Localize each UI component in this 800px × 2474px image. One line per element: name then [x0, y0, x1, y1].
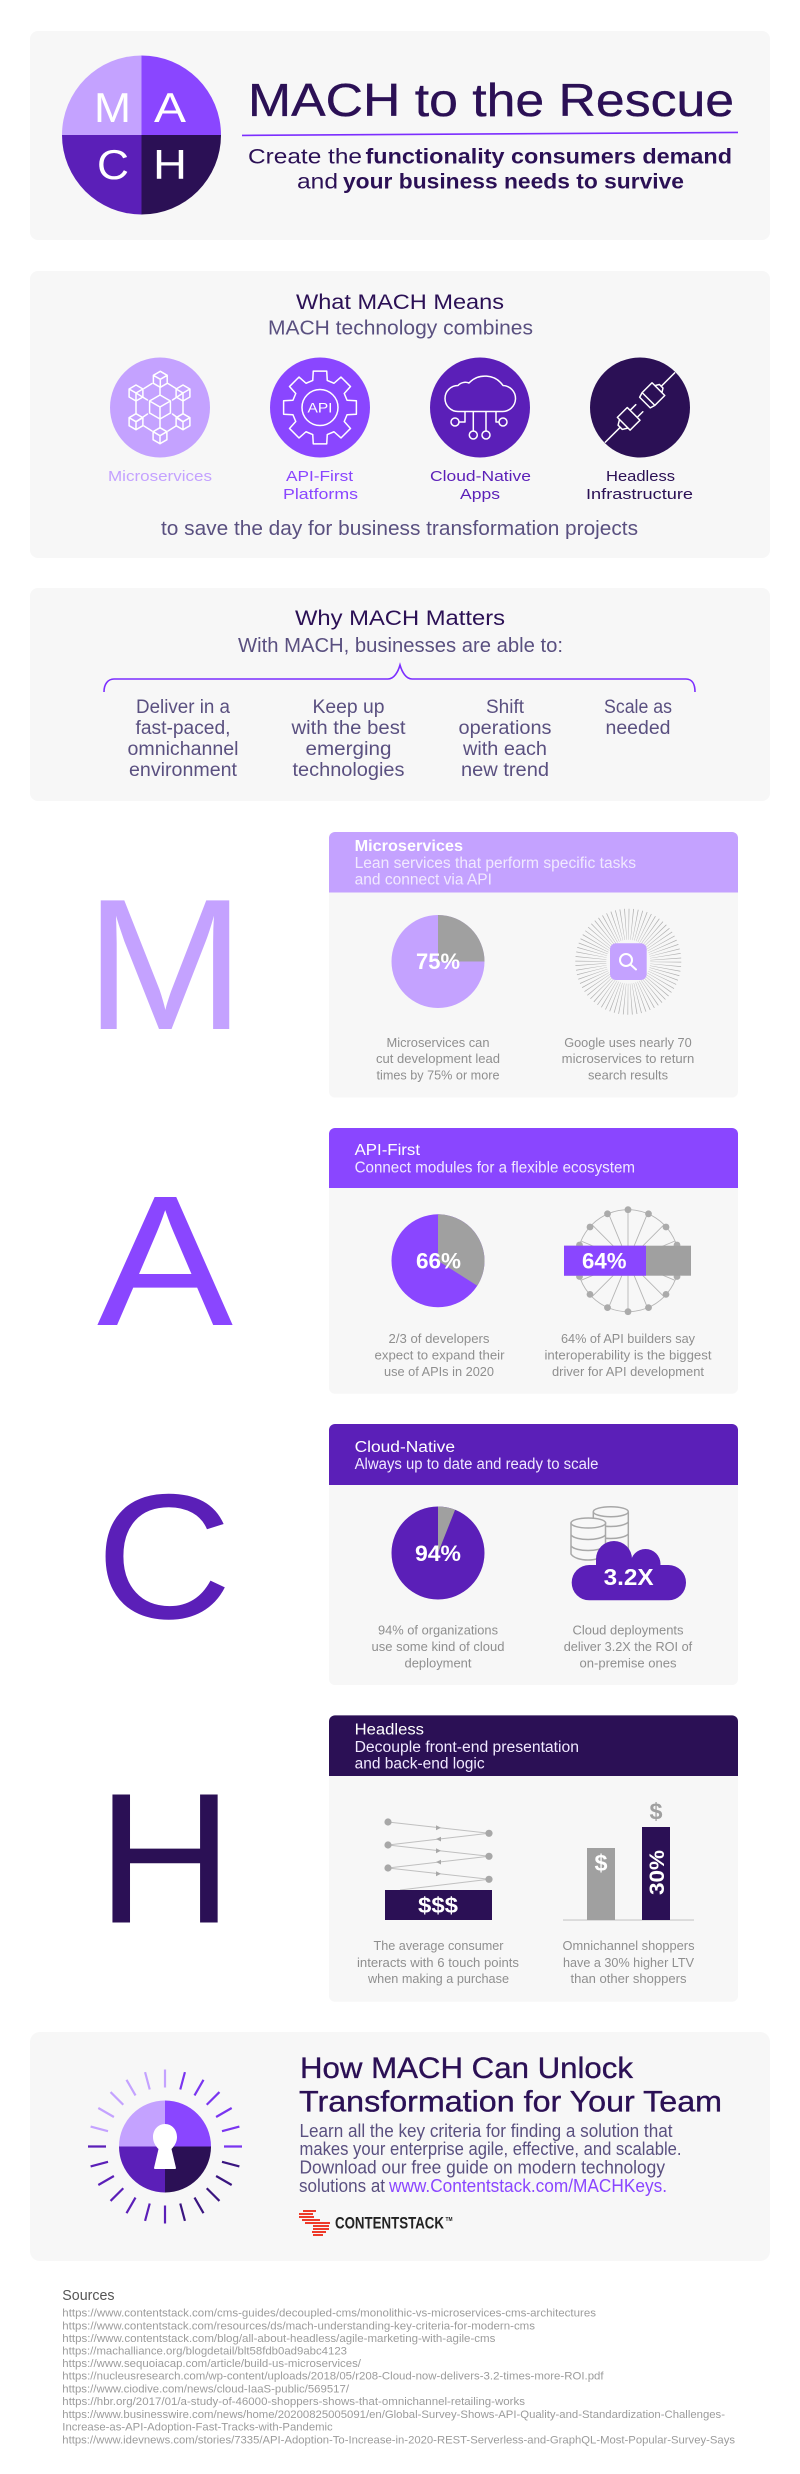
caption: 3.2X: [564, 1623, 693, 1671]
sources list: https://www.sequoiacap.com/article/build-us-microservices/: [62, 2358, 361, 2370]
label: cloud-native apps: Cloud-Native: [430, 468, 531, 485]
body text: solutions at: [299, 2176, 385, 2196]
card heading: Always up to date and ready to scale: [355, 1456, 598, 1473]
pie chart: 66%: 66%: [416, 1248, 461, 1274]
panel: API-First card: [329, 1128, 738, 1394]
big letter H: H: [97, 1756, 233, 1962]
sources list: https://www.contentstack.com/blog/all-about-headless/agile-marketing-with-agile-cms: [62, 2333, 496, 2345]
heading: [299, 2052, 722, 2119]
card heading: and connect via API: [355, 872, 492, 889]
caption: google: search results: [588, 1068, 668, 1083]
bar chart: LTV 30% higher: [563, 1798, 694, 1921]
panel: call to action: [30, 2032, 770, 2261]
sources list: https://nucleusresearch.com/wp-content/uploads/2018/05/r208-Cloud-now-delivers-3.2-times-more-ROI.pdf: [62, 2371, 605, 2383]
body text: Download our free guide on modern technology: [300, 2158, 665, 2178]
pie chart: 66%: [392, 1214, 485, 1307]
sources list: https://www.contentstack.com/cms-guides/decoupled-cms/monolithic-vs-microservices-cms-architectures: [62, 2308, 597, 2320]
label: headless infrastructure: Infrastructure: [586, 486, 693, 503]
body text: [299, 2121, 682, 2196]
caption: 64%: driver for API development: [552, 1364, 704, 1379]
icon: API gear: API: [308, 400, 332, 416]
icon: MACH quadrant logo: H: [153, 141, 187, 188]
benefit: shift: with each: [462, 739, 547, 760]
body text: Learn all the key criteria for finding a solution that: [300, 2121, 672, 2141]
card heading: [355, 1142, 635, 1177]
subtitle: your business needs to survive: [343, 171, 684, 194]
panel: What MACH Means: [30, 271, 770, 558]
label: API-first platforms: API-First: [286, 468, 354, 485]
card heading: [355, 1439, 598, 1473]
panel: Microservices card: [329, 832, 738, 1098]
sources list: https://hbr.org/2017/01/a-study-of-46000-shoppers-shows-that-omnichannel-retailing-works: [62, 2396, 526, 2408]
benefit: deliver: fast-paced,: [136, 718, 230, 739]
subtitle: functionality consumers demand: [366, 146, 732, 169]
subtitle: and: [297, 171, 338, 194]
label: API-first platforms: Platforms: [283, 486, 358, 503]
benefit: shift: Shift: [486, 697, 525, 718]
caption: 66%: [374, 1331, 505, 1379]
benefit: keep up: emerging: [306, 739, 392, 760]
icon: MACH quadrant logo: [62, 56, 221, 214]
panel: title banner: [30, 31, 770, 240]
icon: MACH quadrant logo: M: [94, 84, 131, 131]
heading: What MACH Means: [296, 291, 504, 314]
logo: Contentstack: CONTENTSTACK: [335, 2214, 444, 2232]
caption: google: Google uses nearly 70: [564, 1035, 692, 1050]
bar chart: LTV 30% higher: $: [650, 1798, 663, 1824]
bar chart: LTV 30% higher: 30%: [646, 1850, 669, 1895]
benefit: deliver: Deliver in a: [136, 697, 230, 718]
caption: touch points: interacts with 6 touch points: [357, 1955, 520, 1970]
title: MACH to the Rescue: [248, 74, 734, 126]
closing text: to save the day for business transformation projects: [161, 518, 638, 540]
sources list: https://www.businesswire.com/news/home/20200825005091/en/Global-Survey-Shows-API-Quality-and-Standardization-Challenges-: [62, 2409, 725, 2421]
card heading: [355, 1722, 579, 1773]
subtitle: [248, 146, 732, 194]
caption: 64%: 64% of API builders say: [561, 1331, 695, 1346]
caption: LTV: have a 30% higher LTV: [563, 1955, 694, 1970]
card heading: Decouple front-end presentation: [355, 1739, 579, 1756]
caption: 66%: use of APIs in 2020: [384, 1364, 494, 1379]
pie chart: 94%: [392, 1506, 484, 1600]
caption: google: [562, 1035, 694, 1083]
icon: MACH quadrant logo: C: [97, 141, 129, 188]
pie chart: 75%: 75%: [416, 949, 460, 974]
caption: LTV: [562, 1938, 695, 1986]
icon: keyhole with rays: [88, 2070, 242, 2224]
caption: LTV: than other shoppers: [570, 1971, 687, 1986]
chart: API wheel with 64% bar: [564, 1206, 691, 1315]
subtitle: Create the: [248, 146, 362, 169]
caption: 3.2X: Cloud deployments: [572, 1623, 684, 1638]
panel: Headless card: [329, 1715, 738, 2002]
card heading: [355, 838, 636, 889]
big letter C: C: [96, 1457, 232, 1656]
curly brace: [104, 665, 695, 692]
benefit: keep up: Keep up: [312, 697, 384, 718]
caption: google: microservices to return: [562, 1051, 694, 1066]
big letter M: M: [85, 860, 245, 1069]
card heading: Lean services that perform specific tasks: [355, 855, 636, 872]
sources list: Increase-as-API-Adoption-Fast-Tracks-with-Pandemic: [62, 2422, 333, 2434]
label: cloud-native apps: Apps: [460, 486, 500, 503]
pie chart: 75%: [392, 915, 484, 1008]
caption: LTV: Omnichannel shoppers: [562, 1938, 695, 1953]
logo: Contentstack: [299, 2210, 453, 2236]
caption: 94%: 94% of organizations: [378, 1623, 498, 1638]
body text: www.Contentstack.com/MACHKeys.: [388, 2176, 667, 2196]
caption: 64%: interoperability is the biggest: [544, 1348, 712, 1362]
icon: databases and cloud 3.2X: [571, 1507, 686, 1600]
caption: 66%: expect to expand their: [374, 1348, 505, 1362]
label: cloud-native apps: [430, 468, 531, 503]
caption: touch points: when making a purchase: [367, 1971, 509, 1986]
caption: 75%: [376, 1035, 500, 1083]
caption: 94%: use some kind of cloud: [372, 1639, 504, 1654]
intro text: MACH technology combines: [268, 318, 533, 340]
benefit: deliver: omnichannel: [128, 739, 238, 760]
benefit: shift: new trend: [461, 760, 549, 781]
panel: Cloud-Native card: [329, 1424, 738, 1685]
benefit: scale: [604, 697, 672, 739]
label: microservices: Microservices: [108, 468, 212, 485]
caption: 94%: [372, 1623, 504, 1671]
big letter A: A: [97, 1158, 233, 1365]
icon: API gear: [270, 358, 370, 458]
diagram: touch points zigzag: $$$: [418, 1893, 458, 1918]
caption: 75%: times by 75% or more: [376, 1068, 500, 1083]
diagram: touch points zigzag: [384, 1818, 493, 1920]
benefit: keep up: [290, 697, 406, 781]
card heading: and back-end logic: [355, 1756, 485, 1773]
sources list: [62, 2308, 736, 2446]
sources list: https://www.contentstack.com/resources/ds/mach-understanding-key-criteria-for-modern-cms: [62, 2320, 536, 2332]
bar chart: LTV 30% higher: $: [594, 1850, 608, 1876]
intro text: With MACH, businesses are able to:: [238, 635, 563, 657]
sources list: https://www.idevnews.com/stories/7335/API-Adoption-To-Increase-in-2020-REST-Serverless-and-GraphQL-Most-Popular-Survey-Says: [62, 2434, 736, 2446]
card heading: Microservices: [355, 838, 463, 855]
card heading: Connect modules for a flexible ecosystem: [355, 1160, 635, 1177]
benefit: keep up: with the best: [290, 718, 406, 739]
icon: cloud with connectors: [430, 358, 530, 458]
heading: Why MACH Matters: [295, 607, 505, 630]
benefit: deliver: [128, 697, 238, 781]
icon: MACH quadrant logo: A: [154, 84, 186, 131]
card heading: Cloud-Native: [355, 1439, 455, 1456]
caption: 3.2X: deliver 3.2X the ROI of: [564, 1639, 693, 1654]
pie chart: 94%: 94%: [415, 1541, 461, 1566]
caption: touch points: The average consumer: [374, 1938, 504, 1953]
icon: plug and socket: [590, 358, 690, 458]
panel: Why MACH Matters: [30, 588, 770, 801]
caption: 3.2X: on-premise ones: [580, 1656, 677, 1671]
benefit: keep up: technologies: [292, 760, 404, 781]
benefit: scale: Scale as: [604, 697, 672, 718]
icon: microservices: [110, 358, 210, 458]
label: headless infrastructure: [586, 468, 693, 503]
sources list: https://machalliance.org/blogdetail/blt58fdb0ad9abc4123: [62, 2346, 347, 2358]
benefit: deliver: environment: [129, 760, 238, 781]
sources heading: Sources: [62, 2287, 114, 2304]
chart: API wheel with 64% bar: 64%: [582, 1248, 626, 1274]
caption: 94%: deployment: [404, 1656, 472, 1671]
heading: How MACH Can Unlock: [300, 2052, 634, 2085]
icon: search starburst: [591, 924, 666, 999]
heading: Transformation for Your Team: [299, 2086, 722, 2119]
label: headless infrastructure: Headless: [606, 468, 675, 485]
caption: 66%: 2/3 of developers: [388, 1331, 490, 1346]
icon: databases and cloud 3.2X: 3.2X: [604, 1564, 654, 1590]
caption: 75%: Microservices can: [386, 1035, 490, 1050]
sources list: https://www.ciodive.com/news/cloud-IaaS-public/569517/: [62, 2383, 349, 2395]
caption: touch points: [357, 1938, 520, 1986]
body text: makes your enterprise agile, effective, and scalable.: [300, 2139, 682, 2159]
caption: 64%: [544, 1331, 712, 1379]
benefit: shift: operations: [458, 718, 552, 739]
label: API-first platforms: [283, 468, 358, 503]
benefit: shift: [458, 697, 552, 781]
caption: 75%: cut development lead: [376, 1051, 500, 1066]
logo: Contentstack: TM: [446, 2217, 453, 2223]
card heading: Headless: [355, 1722, 424, 1739]
benefit: scale: needed: [606, 718, 670, 739]
card heading: API-First: [355, 1142, 421, 1159]
